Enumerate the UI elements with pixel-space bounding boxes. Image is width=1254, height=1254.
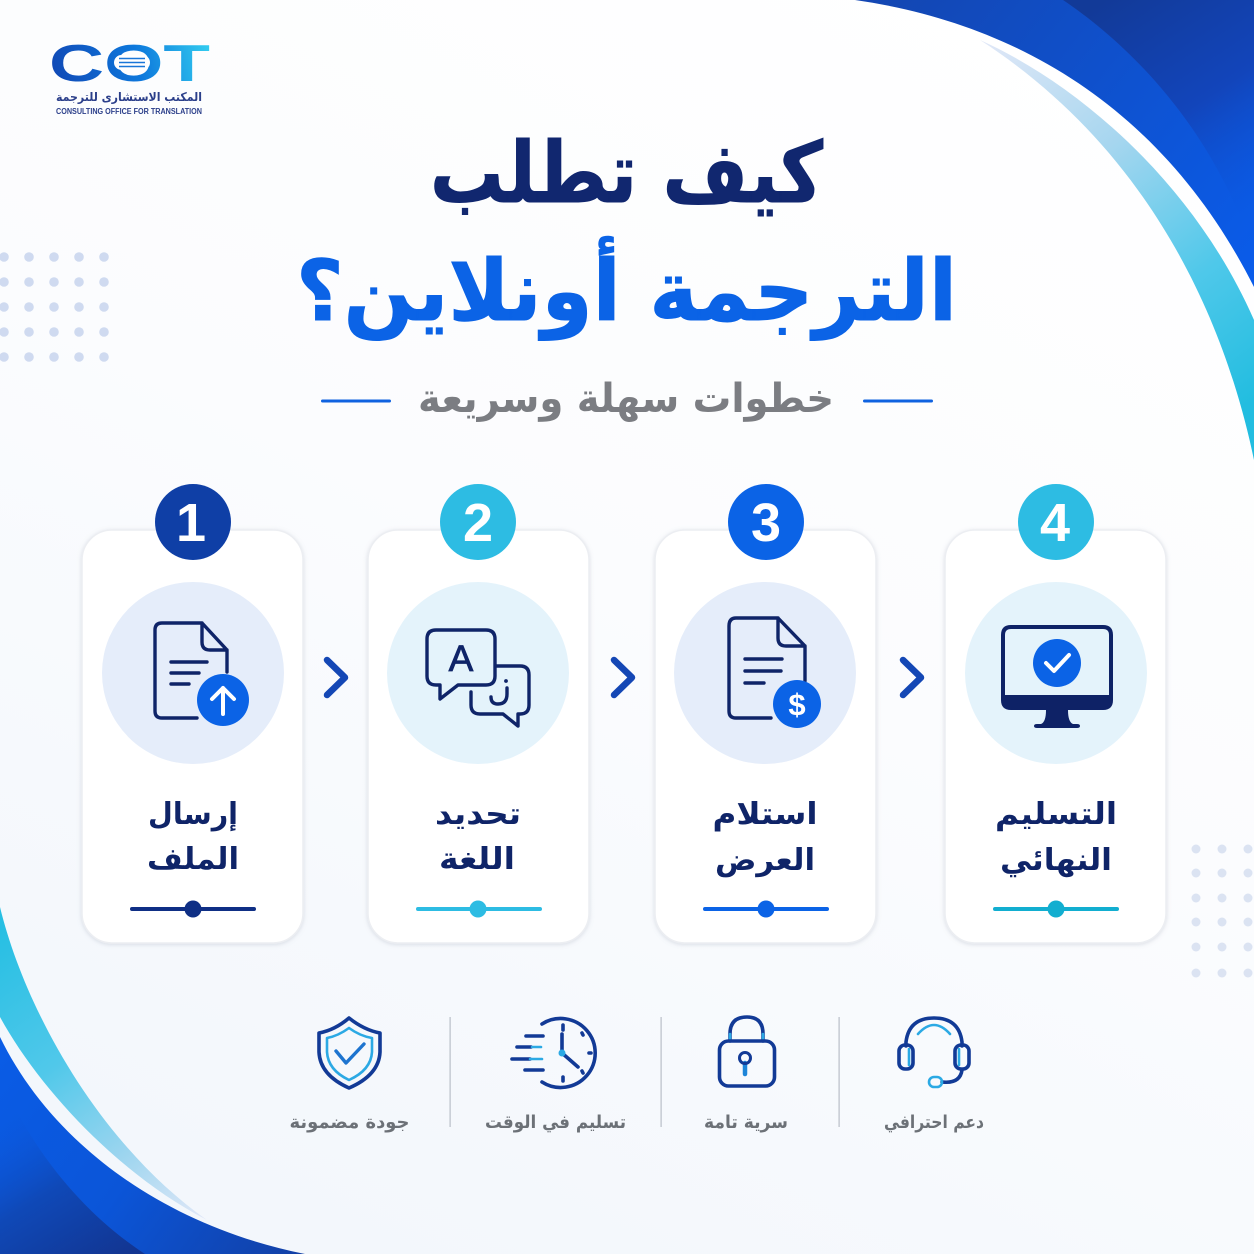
step number 3: 3	[751, 493, 781, 553]
arrow 1	[327, 660, 345, 695]
panel: step 1	[82, 484, 303, 943]
progress marker	[993, 900, 1119, 918]
dot pattern left	[0, 252, 109, 362]
step label	[435, 797, 521, 877]
icon: file with price: $	[788, 687, 806, 722]
step label	[995, 797, 1117, 878]
icon: translation bubbles	[387, 582, 569, 764]
progress marker	[130, 900, 256, 918]
divider	[450, 1017, 451, 1127]
progress marker	[703, 900, 829, 918]
step label: إرسال	[148, 797, 238, 832]
step number 4	[1018, 484, 1094, 560]
progress marker	[416, 900, 542, 918]
step number 2	[440, 484, 516, 560]
step label: العرض	[715, 843, 815, 878]
logo	[49, 35, 210, 116]
title line 1: كيف تطلب	[430, 124, 823, 222]
label: دعم احترافي	[884, 1112, 984, 1133]
feature: professional support	[884, 1018, 984, 1133]
icon: fast clock	[512, 1019, 595, 1088]
icon: shield	[319, 1018, 380, 1088]
arrow 3	[903, 660, 921, 695]
step label: تحديد	[435, 797, 521, 832]
logo: COT	[49, 35, 210, 93]
icon: monitor with check	[965, 582, 1147, 764]
feature: quality	[290, 1018, 410, 1133]
icon: file upload	[102, 582, 284, 764]
step label: اللغة	[439, 842, 515, 877]
step number 2: 2	[463, 493, 493, 553]
bottom-left corner wave	[0, 907, 305, 1254]
panel: step 2	[368, 484, 589, 943]
arrow 2	[614, 660, 632, 695]
step label: استلام	[712, 797, 818, 832]
label: تسليم في الوقت	[485, 1112, 626, 1133]
logo: المكتب الاستشارى للترجمة	[56, 90, 202, 104]
dot pattern right	[1192, 844, 1252, 978]
top-right corner wave	[855, 0, 1254, 460]
step label: النهائي	[1000, 843, 1112, 878]
feature: confidentiality	[704, 1017, 788, 1133]
step number 1	[155, 484, 231, 560]
step number 4: 4	[1040, 493, 1070, 553]
divider	[838, 1017, 840, 1127]
icon: padlock	[720, 1017, 774, 1086]
panel: step 4	[945, 484, 1166, 943]
label: جودة مضمونة	[290, 1112, 410, 1133]
logo: CONSULTING OFFICE FOR TRANSLATION	[56, 107, 202, 116]
panel: step 3	[655, 484, 876, 943]
divider	[660, 1017, 662, 1127]
step number 3	[728, 484, 804, 560]
step label: الملف	[147, 842, 239, 877]
icon: translation bubbles: A	[449, 638, 474, 679]
icon: headset	[899, 1018, 969, 1087]
step label	[147, 797, 239, 877]
step number 1: 1	[176, 493, 206, 553]
title line 2: الترجمة أونلاين؟	[296, 236, 957, 341]
feature: on-time delivery	[485, 1019, 626, 1133]
subtitle: خطوات سهلة وسريعة	[418, 376, 834, 422]
label: سرية تامة	[704, 1112, 788, 1133]
step label	[712, 797, 818, 878]
icon: file with price	[674, 582, 856, 764]
step label: التسليم	[995, 797, 1117, 832]
